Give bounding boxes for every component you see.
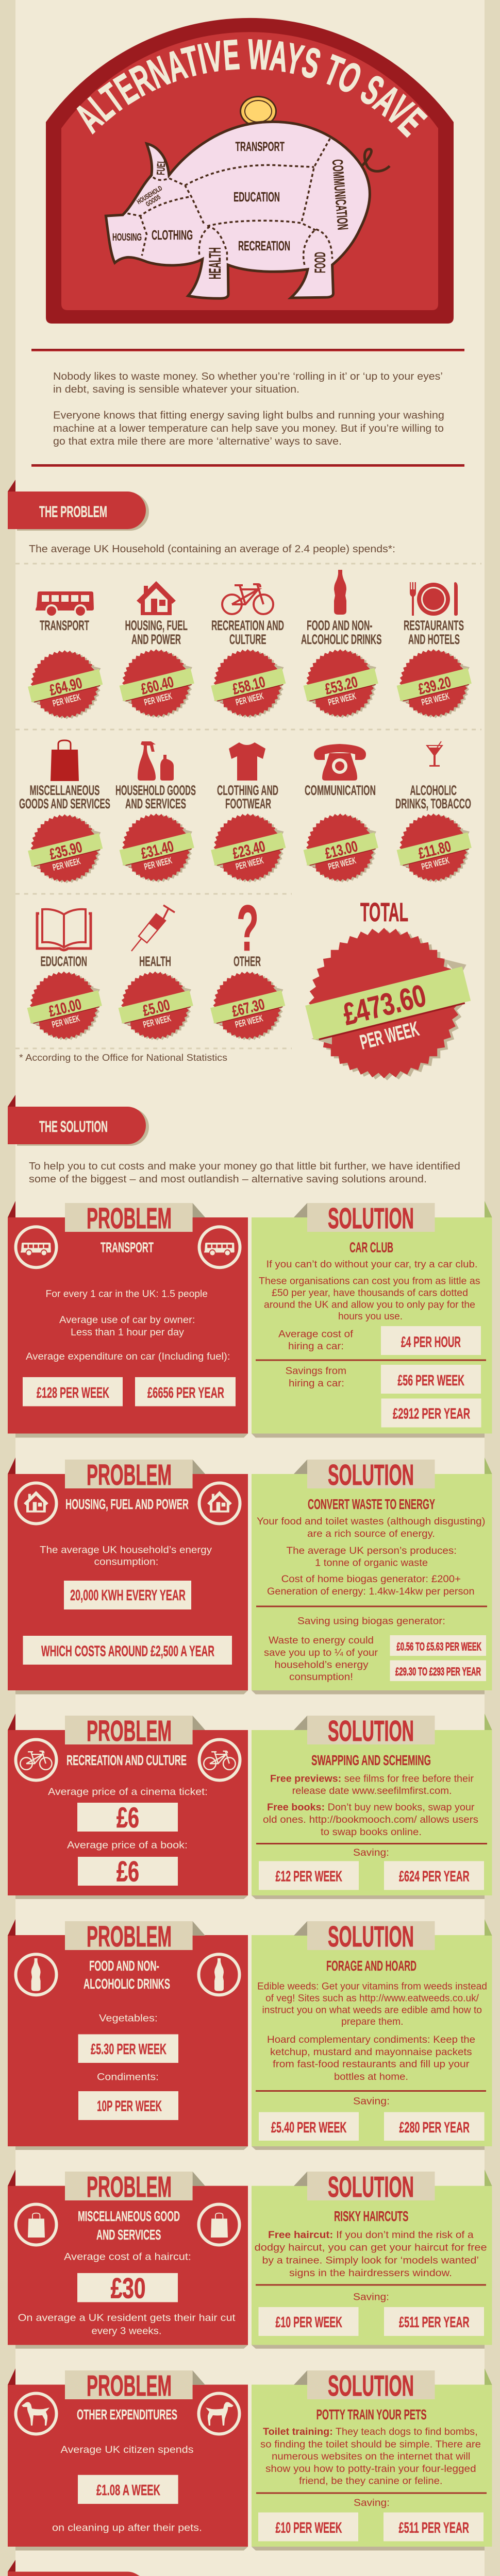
solution text: save you up to ¼ of your <box>264 1648 378 1658</box>
badge: recreation: PER WEEK <box>235 691 264 707</box>
badge: household goods: PER WEEK <box>143 855 173 872</box>
icon: shopping bag <box>51 740 79 781</box>
icon: syringe <box>131 905 175 951</box>
solution figures <box>258 2513 484 2541</box>
problem text: every 3 weeks. <box>92 2326 162 2337</box>
badge: household goods <box>120 814 194 883</box>
icon: house right <box>199 1483 240 1524</box>
icon: bicycle right <box>199 1739 240 1781</box>
panel: pets problem and solution <box>8 2368 492 2550</box>
spending intro: The average UK Household (containing an average of 2.4 people) spends*: <box>29 544 395 555</box>
pig section labels: HOUSEHOLD <box>136 184 163 206</box>
solution text: consumption! <box>289 1672 353 1683</box>
spending labels row 2: CLOTHING AND <box>217 783 278 798</box>
solution text: by a trainee. Simply look for ‘models wanted’ <box>262 2255 479 2266</box>
solution text: £50 per year, have thousands of cars dotted <box>272 1288 468 1299</box>
problem figure: £1.08 A WEEK <box>96 2482 160 2499</box>
solution figures <box>381 1326 481 1427</box>
badge: transport <box>28 650 103 719</box>
badge: restaurants: £39.20 <box>416 673 453 698</box>
spending labels row 1: FOOD AND NON- <box>307 618 372 633</box>
solution intro <box>29 1161 460 1185</box>
solution intro: some of the biggest – and most outlandish – alternative saving solutions around. <box>29 1174 427 1185</box>
solution text: Hoard complementary condiments: Keep the <box>267 2035 475 2045</box>
problem text: Less than 1 hour per day <box>71 1327 185 1338</box>
spending labels row 2 <box>19 783 471 811</box>
badge: total: £473.60 <box>340 978 429 1032</box>
solution figures: £4 PER HOUR <box>401 1334 461 1350</box>
panel: miscellaneous problem and solution <box>8 2170 492 2349</box>
icon: t-shirt <box>229 742 265 781</box>
solution text: The average UK person’s produces: <box>287 1546 457 1556</box>
solution text: numerous websites on the internet that will <box>272 2451 470 2462</box>
problem figures: WHICH COSTS AROUND £2,500 A YEAR <box>41 1643 214 1660</box>
problem text: on cleaning up after their pets. <box>52 2522 202 2534</box>
problem text: FOOD AND NON- <box>89 1958 159 1974</box>
spending labels row 2: MISCELLANEOUS <box>30 783 100 798</box>
pig section labels: RECREATION <box>238 238 290 253</box>
solution text <box>260 2406 481 2509</box>
pig section labels: CLOTHING <box>152 227 193 243</box>
badge: education <box>27 972 102 1040</box>
badge: clothing <box>211 814 286 883</box>
problem text: Average UK citizen spends <box>61 2445 194 2455</box>
panel: recreation problem and solution: PROBLEM <box>87 1715 172 1748</box>
solution figures <box>259 1861 484 1890</box>
solution figures: £10 PER WEEK <box>275 2314 342 2331</box>
problem text: Average cost of a haircut: <box>64 2252 191 2263</box>
problem text <box>52 2406 202 2534</box>
solution text: Cost of home biogas generator: £200+ <box>281 1574 461 1585</box>
solution text: around the UK and allow you to only pay for the <box>264 1299 475 1311</box>
spending labels row 3: OTHER <box>234 954 261 969</box>
badge: other: PER WEEK <box>234 1013 264 1030</box>
spending labels row 1: AND HOTELS <box>408 632 460 647</box>
pig section labels: FUEL <box>154 159 168 175</box>
badge: clothing: PER WEEK <box>235 855 264 872</box>
icon: bus right <box>199 1227 240 1267</box>
panel: transport problem and solution: SOLUTION <box>328 1202 414 1235</box>
problem text: Average expenditure on car (Including fuel): <box>26 1351 230 1362</box>
badge: food: £53.20 <box>323 673 359 698</box>
spending labels row 3: EDUCATION <box>40 954 87 969</box>
intro text: Nobody likes to waste money. So whether you’re ‘rolling in it’ or ‘up to your eyes’ <box>53 371 443 382</box>
problem text <box>40 1496 212 1567</box>
spending labels row 1: RECREATION AND <box>211 618 284 633</box>
problem text: The average UK household’s energy <box>40 1545 212 1556</box>
badge: household goods: £31.40 <box>139 838 175 862</box>
problem figures: £6656 PER YEAR <box>147 1385 224 1401</box>
spending labels row 3 <box>40 954 261 969</box>
badge: communication <box>304 814 378 883</box>
icon: bottle <box>334 570 346 615</box>
section tab: the solution: THE SOLUTION <box>39 1117 108 1136</box>
pig section labels: GOODS <box>144 193 162 208</box>
solution text: Average cost of <box>278 1329 354 1340</box>
spending labels row 2: AND SERVICES <box>125 796 186 811</box>
spending labels row 1: TRANSPORT <box>40 618 89 633</box>
solution text: SWAPPING AND SCHEMING <box>311 1752 431 1768</box>
solution text: bottles at home. <box>334 2072 408 2082</box>
spending labels row 3: HEALTH <box>139 954 171 969</box>
panel: transport problem and solution: PROBLEM <box>87 1202 172 1235</box>
icon: house left <box>15 1483 57 1524</box>
solution text: If you can’t do without your car, try a car club. <box>266 1259 477 1270</box>
badge: other <box>210 972 286 1040</box>
solution text <box>255 2208 487 2303</box>
intro text: in debt, saving is sensible whatever your situation. <box>53 384 299 395</box>
problem text: TRANSPORT <box>101 1240 154 1256</box>
badge: miscellaneous: £35.90 <box>48 839 84 863</box>
pig section labels: EDUCATION <box>234 189 280 205</box>
problem text: Condiments: <box>97 2072 159 2082</box>
badge: communication: £13.00 <box>323 838 359 862</box>
badge: total: PER WEEK <box>358 1018 421 1054</box>
solution intro: To help you to cut costs and make your money go that little bit further, we have identified <box>29 1161 460 1172</box>
problem text: HOUSING, FUEL AND POWER <box>65 1496 189 1512</box>
solution text: from fast-food restaurants and fill up your <box>273 2059 470 2070</box>
solution text: Free haircut: If you don’t mind the risk of a <box>268 2230 474 2241</box>
pig section labels: HOUSING <box>112 232 142 243</box>
spending labels row 1: AND POWER <box>131 632 181 647</box>
solution text: instruct you on what weeds are edible amd how to <box>262 2005 482 2015</box>
badge: transport: PER WEEK <box>52 692 81 708</box>
problem text <box>48 1752 208 1851</box>
solution text: so finding the toilet should be simple. There are <box>260 2439 481 2450</box>
solution text: release date www.seefilmfirst.com. <box>292 1786 452 1797</box>
pig section labels: TRANSPORT <box>235 140 285 154</box>
spending labels row 2: ALCOHOLIC <box>410 783 457 798</box>
solution text: Your food and toilet wastes (although disgusting) <box>257 1516 486 1527</box>
problem text: RECREATION AND CULTURE <box>66 1752 187 1768</box>
solution text: Generation of energy: 1.4kw-14kw per person <box>267 1586 474 1597</box>
solution text: Toilet training: They teach dogs to find bombs, <box>263 2427 478 2437</box>
intro text <box>53 371 444 447</box>
total heading: TOTAL <box>360 897 408 927</box>
footnote: * According to the Office for National Statistics <box>19 1053 227 1063</box>
panel: food problem and solution <box>8 1919 492 2150</box>
icon: pig <box>106 122 390 298</box>
solution text: ketchup, mustard and mayonnaise packets <box>270 2047 472 2058</box>
problem text: AND SERVICES <box>96 2227 161 2243</box>
solution text: RISKY HAIRCUTS <box>334 2208 408 2224</box>
intro text: machine at a lower temperature can help save you money. But if you’re willing to <box>53 423 444 434</box>
badge: health: PER WEEK <box>142 1013 172 1030</box>
badge: recreation: £58.10 <box>231 673 267 698</box>
icon: coin <box>240 96 277 127</box>
solution text: Saving: <box>353 2292 389 2303</box>
icon: cleaning bottles <box>138 741 174 781</box>
solution text: Saving: <box>353 2096 390 2107</box>
solution text: to swap books online. <box>321 1827 422 1838</box>
badge: health <box>119 972 193 1040</box>
solution text: Savings from <box>286 1366 346 1377</box>
solution text <box>263 1752 478 1858</box>
section tab: the problem <box>8 480 149 531</box>
badge: restaurants <box>397 649 472 718</box>
badge: alcohol: PER WEEK <box>421 855 451 872</box>
problem figures <box>23 1581 232 1665</box>
problem text: MISCELLANEOUS GOOD <box>78 2208 180 2224</box>
problem text: Average price of a book: <box>67 1840 188 1851</box>
solution text <box>257 1496 486 1683</box>
solution figures: £12 PER WEEK <box>275 1869 342 1885</box>
panel: food problem and solution: PROBLEM <box>87 1920 172 1953</box>
section tab: the totals <box>8 2560 149 2576</box>
icon: bag left <box>15 2204 57 2245</box>
problem figures: £5.30 PER WEEK <box>91 2041 166 2058</box>
badge: alcohol <box>397 814 472 883</box>
panel: housing problem and solution: SOLUTION <box>328 1459 414 1492</box>
panel: food problem and solution: SOLUTION <box>328 1920 414 1953</box>
icon: bicycle left <box>15 1739 57 1781</box>
pig section labels: HEALTH <box>206 247 224 279</box>
panel: recreation problem and solution <box>8 1714 492 1899</box>
badge: restaurants: PER WEEK <box>421 691 451 707</box>
badge: communication: PER WEEK <box>327 855 357 872</box>
solution text: hours you use. <box>338 1311 403 1322</box>
icon: book <box>37 909 91 950</box>
solution text: hiring a car: <box>288 1341 344 1352</box>
problem figures: £6 <box>116 1855 139 1888</box>
icon: dog left <box>15 2394 57 2434</box>
icon: telephone <box>314 744 366 781</box>
title: ALTERNATIVE WAYS TO SAVE <box>76 39 428 138</box>
problem figure: £30 <box>111 2272 146 2304</box>
problem figures <box>78 2034 178 2120</box>
spending labels row 2: HOUSEHOLD GOODS <box>115 783 196 798</box>
panel: miscellaneous problem and solution: PROBLEM <box>87 2171 172 2204</box>
badge: housing: PER WEEK <box>143 691 173 707</box>
panel: miscellaneous problem and solution: SOLUTION <box>328 2171 414 2204</box>
spending labels row 2: COMMUNICATION <box>305 783 376 798</box>
section tab: the solution <box>8 1095 149 1146</box>
panel: transport problem and solution <box>8 1201 492 1437</box>
spending labels row 1: CULTURE <box>229 632 266 647</box>
solution text: Free books: Don’t buy new books, swap your <box>267 1802 475 1813</box>
problem figures: £6 <box>116 1801 139 1834</box>
spending labels row 2: GOODS AND SERVICES <box>19 796 110 811</box>
spending labels row 2: FOOTWEAR <box>225 796 271 811</box>
icon: plate and cutlery <box>410 582 458 616</box>
badge: health: £5.00 <box>141 996 172 1020</box>
solution text: hiring a car: <box>289 1378 344 1389</box>
badge: alcohol: £11.80 <box>416 838 453 862</box>
icon: bicycle <box>222 584 273 614</box>
spending labels row 1: ALCOHOLIC DRINKS <box>301 632 381 647</box>
spending labels row 1 <box>40 618 464 647</box>
problem text <box>84 1958 170 2082</box>
solution text: Edible weeds: Get your vitamins from weeds instead <box>257 1981 487 1992</box>
solution figures <box>259 2112 485 2141</box>
badge: miscellaneous <box>28 815 103 883</box>
icon: bag right <box>199 2204 239 2245</box>
solution text: CAR CLUB <box>349 1240 393 1256</box>
solution text: prepare them. <box>341 2016 403 2027</box>
solution text <box>259 1240 480 1389</box>
icon: bottle left <box>15 1954 57 1995</box>
problem text: OTHER EXPENDITURES <box>77 2406 177 2422</box>
badge: housing <box>120 649 194 718</box>
solution text: Free previews: see films for free before their <box>270 1774 474 1785</box>
icon: bus left <box>15 1227 57 1267</box>
badge: education: PER WEEK <box>51 1013 81 1030</box>
problem text <box>18 2208 236 2337</box>
solution text: friend, be they canine or feline. <box>299 2476 443 2487</box>
icon: dog right <box>199 2394 239 2434</box>
badge: food <box>304 649 378 718</box>
panel: pets problem and solution: SOLUTION <box>328 2369 414 2402</box>
badge: clothing: £23.40 <box>231 838 267 862</box>
problem figure <box>78 2475 178 2504</box>
badge: transport: £64.90 <box>48 674 84 699</box>
problem text: Average use of car by owner: <box>59 1315 195 1326</box>
solution text: Waste to energy could <box>269 1635 374 1646</box>
panel: housing problem and solution: PROBLEM <box>87 1459 172 1492</box>
solution text: household’s energy <box>275 1660 369 1671</box>
solution figures <box>259 2307 484 2336</box>
solution text: Saving: <box>353 1848 389 1858</box>
solution text: 1 tonne of organic waste <box>315 1558 428 1568</box>
solution text: FORAGE AND HOARD <box>326 1958 416 1974</box>
icon: bus <box>36 591 94 616</box>
solution text: Saving: <box>354 2498 390 2509</box>
solution text: Saving using biogas generator: <box>297 1616 445 1627</box>
problem text <box>26 1240 230 1362</box>
solution text: signs in the hairdressers window. <box>289 2268 452 2279</box>
icon: question mark: ? <box>237 892 259 964</box>
problem figures: £128 PER WEEK <box>37 1385 109 1401</box>
spending labels row 1: HOUSING, FUEL <box>125 618 188 633</box>
problem figures: 20,000 KWH EVERY YEAR <box>70 1587 186 1604</box>
intro text: go that extra mile there are more ‘alternative’ ways to save. <box>53 436 342 447</box>
solution text <box>257 1958 487 2107</box>
pig section labels: COMMUNICATION <box>329 159 351 231</box>
pig section labels: FOOD <box>312 252 329 273</box>
icon: cocktail <box>426 741 443 767</box>
badge: recreation <box>211 649 286 718</box>
panel: recreation problem and solution: SOLUTION <box>328 1715 414 1748</box>
icon: house <box>137 581 176 615</box>
solution text: These organisations can cost you from as little as <box>259 1276 480 1287</box>
badge: housing: £60.40 <box>139 673 175 698</box>
solution figures: £5.40 PER WEEK <box>271 2120 346 2136</box>
problem text: On average a UK resident gets their hair cut <box>18 2313 236 2324</box>
problem figure <box>77 2272 178 2304</box>
problem text: For every 1 car in the UK: 1.5 people <box>45 1289 208 1300</box>
intro text: Everyone knows that fitting energy saving light bulbs and running your washing <box>53 410 444 421</box>
badge: miscellaneous: PER WEEK <box>52 856 81 873</box>
section tab: the problem: THE PROBLEM <box>39 503 107 520</box>
solution figures: £10 PER WEEK <box>275 2520 342 2536</box>
solution text: POTTY TRAIN YOUR PETS <box>316 2406 427 2422</box>
badge: total <box>305 928 471 1080</box>
problem text: Vegetables: <box>99 2013 158 2024</box>
solution figures <box>390 1635 486 1681</box>
problem figures: 10P PER WEEK <box>97 2098 162 2115</box>
solution text: of veg! Sites such as http://www.eatweeds.co.uk/ <box>265 1993 479 2004</box>
solution text: show you how to potty-train your four-legged <box>265 2464 476 2475</box>
solution text: are a rich source of energy. <box>307 1529 435 1539</box>
problem text: Average price of a cinema ticket: <box>48 1787 208 1798</box>
icon: bottle right <box>199 1954 239 1995</box>
panel: housing problem and solution <box>8 1458 492 1694</box>
problem figures <box>77 1801 178 1888</box>
problem figures <box>23 1377 236 1406</box>
pig section labels <box>112 140 351 279</box>
problem text: ALCOHOLIC DRINKS <box>84 1976 170 1992</box>
badge: other: £67.30 <box>230 996 266 1020</box>
solution text: old ones. http://bookmooch.com/ allows users <box>263 1815 478 1825</box>
solution text: dodgy haircut, you can get your haircut for free <box>255 2242 487 2253</box>
hero badge with piggy bank <box>46 18 454 324</box>
problem text: consumption: <box>94 1557 159 1567</box>
badge: food: PER WEEK <box>327 691 357 707</box>
badge: education: £10.00 <box>47 996 83 1020</box>
panel: pets problem and solution: PROBLEM <box>87 2369 172 2402</box>
